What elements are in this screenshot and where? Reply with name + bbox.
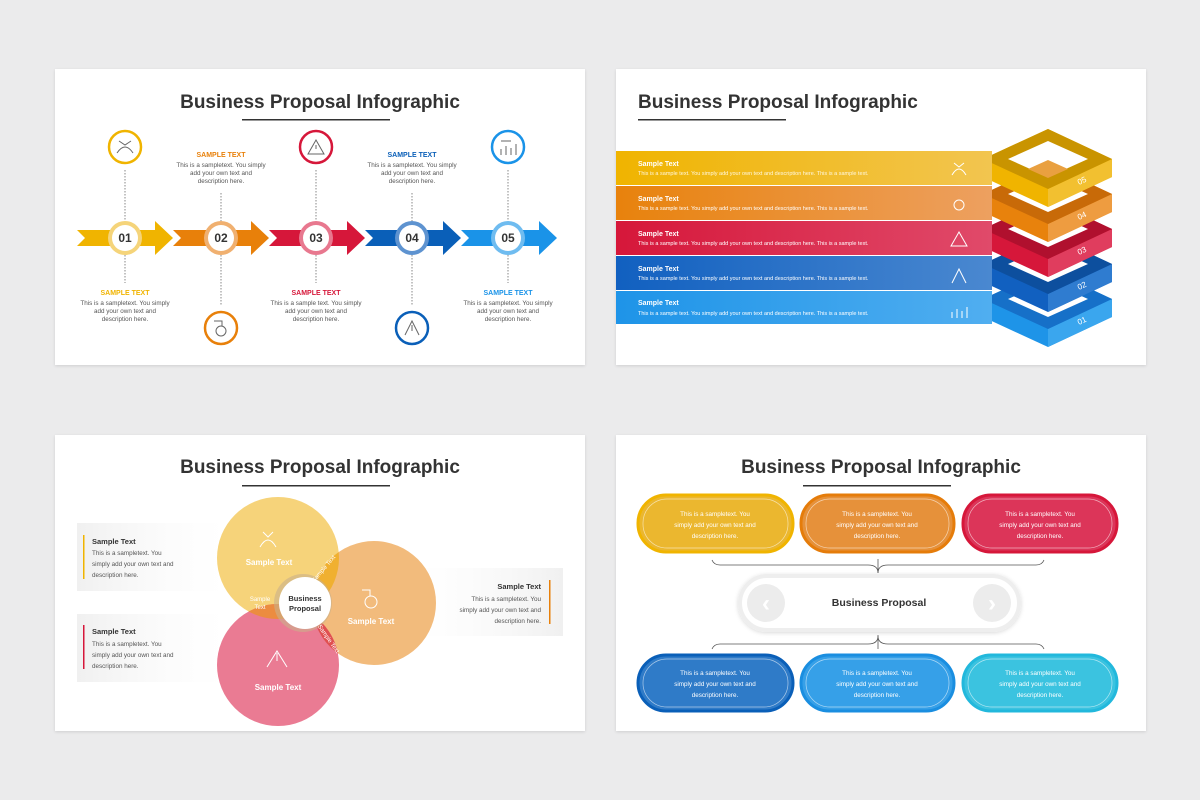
- text blocks: add your own text and: [381, 170, 443, 177]
- arrow row: 01: [118, 231, 132, 245]
- text blocks: description here.: [293, 316, 340, 323]
- venn circles: Proposal: [289, 604, 321, 613]
- side box: left bottom: This is a sampletext. You: [92, 641, 162, 648]
- venn circles: Sample Text: [246, 558, 293, 567]
- top pills: [638, 495, 1117, 552]
- bottom pills: simply add your own text and: [836, 681, 918, 688]
- venn circles: Sample Text: [255, 683, 302, 692]
- venn circles: Sample Text: [348, 617, 395, 626]
- top pills: This is a sampletext. You: [1005, 511, 1075, 518]
- text blocks: SAMPLE TEXT: [387, 152, 437, 159]
- dotted connectors: [125, 170, 508, 306]
- top pills: This is a sampletext. You: [842, 511, 912, 518]
- 3D stack: 05: [1076, 175, 1088, 187]
- bars: This is a sample text. You simply add your own text and description here. This is a sample text.: [638, 276, 869, 282]
- bars: Sample Text: [638, 266, 679, 273]
- venn circles: Sample: [250, 597, 271, 603]
- panel: venn diagram: [55, 435, 585, 731]
- side box: left top: Sample Text: [92, 537, 136, 546]
- top pills: description here.: [854, 533, 901, 540]
- title: Business Proposal Infographic: [180, 92, 460, 113]
- side box: right: simply add your own text and: [459, 607, 541, 614]
- bars: This is a sample text. You simply add your own text and description here. This is a sample text.: [638, 206, 869, 212]
- venn circles: Sample Text: [316, 624, 340, 655]
- side box: left top: description here.: [92, 572, 139, 579]
- text blocks: add your own text and: [285, 308, 347, 315]
- bars: This is a sample text. You simply add your own text and description here. This is a sample text.: [638, 311, 869, 317]
- bottom pills: This is a sampletext. You: [680, 670, 750, 677]
- text blocks: description here.: [102, 316, 149, 323]
- center pill: Business Proposal: [832, 597, 926, 609]
- side box: left bottom: simply add your own text and: [92, 652, 174, 659]
- side box: left top: This is a sampletext. You: [92, 550, 162, 557]
- side box: right: Sample Text: [497, 582, 541, 591]
- 3D stack: 03: [1076, 245, 1088, 257]
- text blocks: description here.: [485, 316, 532, 323]
- bars: Sample Text: [638, 231, 679, 238]
- side box: right: [410, 568, 563, 636]
- center pill: ‹: [762, 590, 770, 617]
- text blocks: SAMPLE TEXT: [196, 152, 246, 159]
- top pills: description here.: [1017, 533, 1064, 540]
- top pills: simply add your own text and: [836, 522, 918, 529]
- arrow row: 04: [405, 231, 419, 245]
- arrow row: 02: [214, 231, 228, 245]
- arrow row: 03: [309, 231, 323, 245]
- arrow row: 05: [501, 231, 515, 245]
- venn circles: [217, 497, 436, 726]
- panel: stacked bars: [616, 69, 1146, 365]
- bottom pills: description here.: [854, 692, 901, 699]
- bars: Sample Text: [638, 196, 679, 203]
- text blocks: SAMPLE TEXT: [100, 290, 150, 297]
- 3D stack: 02: [1076, 280, 1088, 292]
- bottom pills: [638, 655, 1117, 711]
- side box: left bottom: description here.: [92, 663, 139, 670]
- title: Business Proposal Infographic: [638, 92, 918, 113]
- bars: Sample Text: [638, 300, 679, 307]
- bars: Sample Text: [638, 161, 679, 168]
- 3D stack: 01: [1076, 315, 1088, 327]
- bottom pills: This is a sampletext. You: [1005, 670, 1075, 677]
- text blocks: description here.: [389, 178, 436, 185]
- bottom pills: description here.: [1017, 692, 1064, 699]
- text blocks: add your own text and: [477, 308, 539, 315]
- bars: [616, 151, 992, 324]
- 3D stack: [983, 129, 1112, 347]
- side box: right: This is a sampletext. You: [471, 596, 541, 603]
- text blocks: This is a sampletext. You simply: [80, 300, 170, 307]
- bar icons: [951, 163, 967, 318]
- text blocks: SAMPLE TEXT: [483, 290, 533, 297]
- text blocks: This is a sampletext. You simply: [176, 162, 266, 169]
- top pills: This is a sampletext. You: [680, 511, 750, 518]
- arrow row: [77, 221, 557, 255]
- text blocks: add your own text and: [190, 170, 252, 177]
- text blocks: This is a sample text. You simply: [270, 300, 362, 307]
- venn circles: Sample Text: [311, 555, 337, 584]
- side box: left bottom: [77, 614, 227, 682]
- center pill: ›: [988, 590, 996, 617]
- text blocks: This is a sampletext. You simply: [367, 162, 457, 169]
- bottom pills: simply add your own text and: [999, 681, 1081, 688]
- bottom pills: simply add your own text and: [674, 681, 756, 688]
- bars: This is a sample text. You simply add your own text and description here. This is a sample text.: [638, 171, 869, 177]
- bottom pills: description here.: [692, 692, 739, 699]
- side box: left bottom: Sample Text: [92, 627, 136, 636]
- text blocks: SAMPLE TEXT: [291, 290, 341, 297]
- side box: right: description here.: [494, 618, 541, 625]
- text blocks: This is a sampletext. You simply: [463, 300, 553, 307]
- center pill: [740, 576, 1019, 630]
- bars: This is a sample text. You simply add your own text and description here. This is a sample text.: [638, 241, 869, 247]
- panel: timeline arrows: [55, 69, 585, 365]
- side box: left top: simply add your own text and: [92, 561, 174, 568]
- venn circles: Business: [288, 594, 322, 603]
- title: Business Proposal Infographic: [180, 457, 460, 478]
- text blocks: [80, 152, 553, 323]
- 3D stack: 04: [1076, 210, 1088, 222]
- venn circles: Text: [254, 605, 266, 611]
- top pills: simply add your own text and: [999, 522, 1081, 529]
- connector arrows: [712, 559, 1044, 649]
- text blocks: description here.: [198, 178, 245, 185]
- title: Business Proposal Infographic: [741, 457, 1021, 478]
- side box: left top: [77, 523, 227, 591]
- bottom pills: This is a sampletext. You: [842, 670, 912, 677]
- top pills: description here.: [692, 533, 739, 540]
- icon circles: [109, 131, 524, 344]
- top pills: simply add your own text and: [674, 522, 756, 529]
- text blocks: add your own text and: [94, 308, 156, 315]
- panel: pill boxes: [616, 435, 1146, 731]
